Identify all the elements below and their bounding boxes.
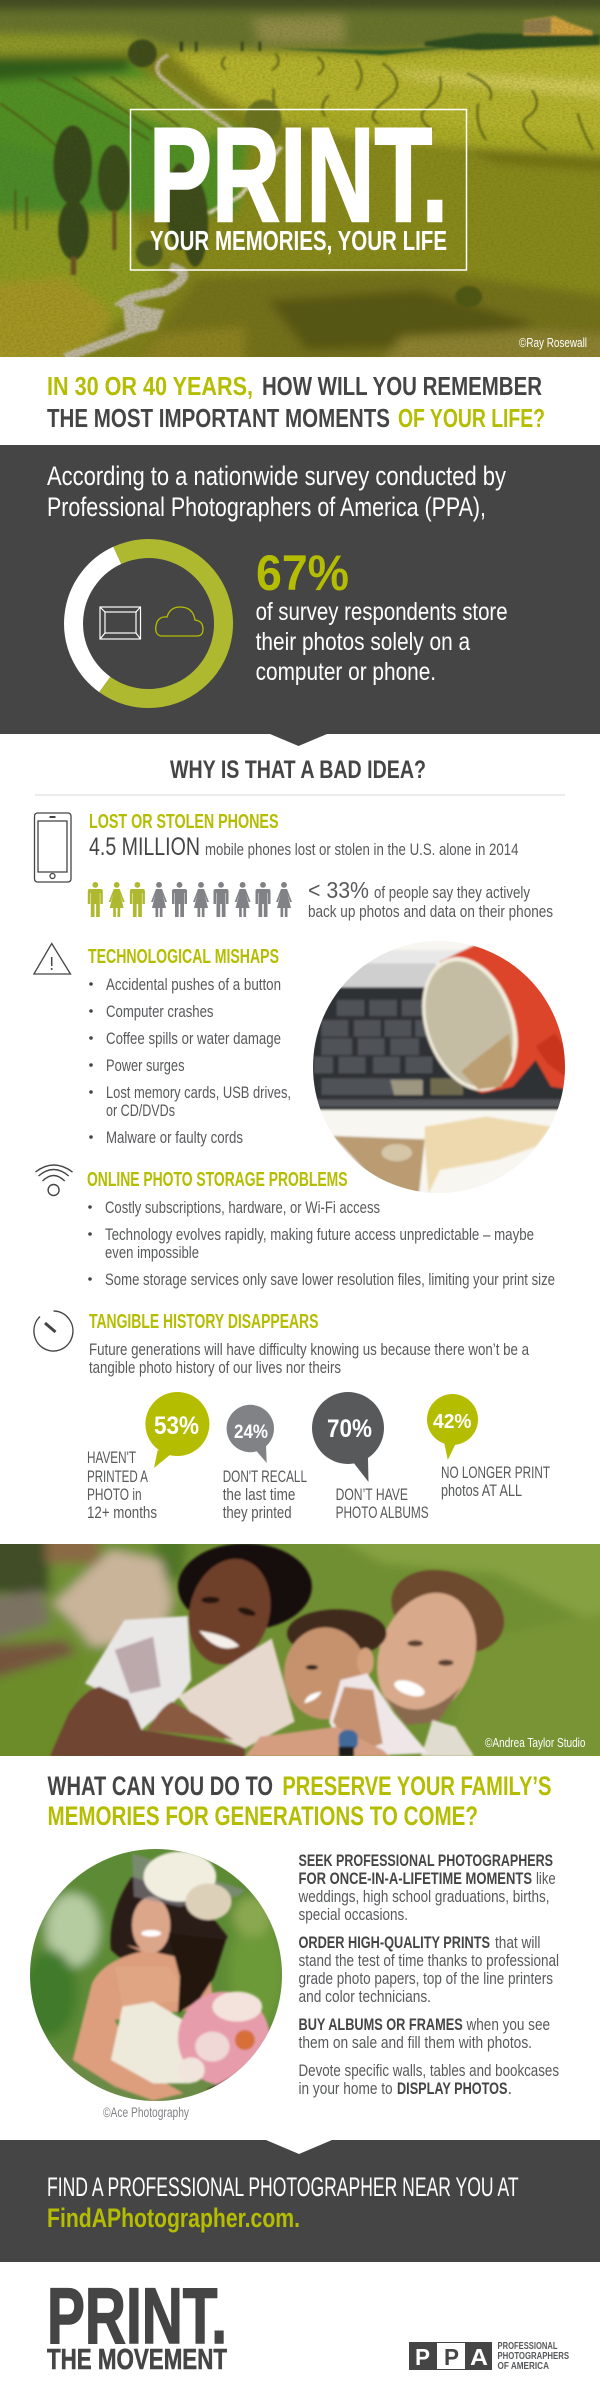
stat description: [256, 598, 508, 686]
advice: display photos: [298, 2062, 559, 2098]
hair over shoulder: [168, 1933, 226, 2013]
main question heading: [47, 371, 545, 433]
woman: white knit top: [85, 1616, 191, 1730]
section: technological mishaps: Accidental pushes of a button: [106, 976, 281, 994]
stat bubble: 42%: 42%: [433, 1411, 472, 1433]
advice: order high-quality prints: [298, 1934, 559, 2006]
stat: less than 33 percent back up: < 33%: [308, 877, 369, 903]
stat bubble: 70%: 70%: [327, 1415, 372, 1443]
chest: [181, 1984, 182, 1994]
logo: Print. The Movement: [47, 2271, 227, 2376]
section: technological mishaps: Coffee spills or water damage: [106, 1030, 281, 1048]
advice: display photos: in your home to: [298, 2080, 393, 2098]
advice: order high-quality prints: that will: [495, 1934, 540, 1952]
advice: seek professional photographers: FOR ONCE-IN-A-LIFETIME MOMENTS: [298, 1870, 532, 1888]
advice: seek professional photographers: weddings, high school graduations, births,: [298, 1888, 550, 1906]
stat bubble: 24%: 24%: [234, 1422, 268, 1443]
logo: Professional Photographers of America: A: [470, 2344, 488, 2370]
advice: order high-quality prints: and color technicians.: [298, 1988, 431, 2006]
advice: seek professional photographers: like: [536, 1870, 556, 1888]
survey intro text: [47, 461, 506, 522]
section: online photo storage problems: Costly subscriptions, hardware, or Wi-Fi access: [105, 1199, 380, 1217]
stat description: their photos solely on a: [256, 628, 470, 656]
section: technological mishaps: Malware or faulty cords: [106, 1129, 243, 1147]
section: lost or stolen phones: [89, 811, 518, 861]
photo: bride with bouquet: [30, 1849, 282, 2101]
main question heading: IN 30 OR 40 YEARS,: [47, 371, 253, 401]
baby: [287, 1609, 386, 1657]
stat bubble: 42%: photos AT ALL: [441, 1482, 522, 1500]
stat bubble: 24%: DON'T RECALL: [223, 1468, 307, 1486]
stat bubble: 53%: [87, 1392, 209, 1522]
hero title box: [130, 101, 466, 270]
logo: Professional Photographers of America: [409, 2340, 569, 2372]
icon: photo frame: [100, 607, 140, 639]
section: technological mishaps: Power surges: [106, 1057, 184, 1075]
advice: seek professional photographers: special occasions.: [298, 1906, 408, 1924]
advice: display photos: DISPLAY PHOTOS: [397, 2080, 508, 2098]
section: tangible history disappears: TANGIBLE HISTORY DISAPPEARS: [89, 1311, 318, 1333]
stat bubble: 53%: HAVEN'T: [87, 1449, 136, 1467]
panel: find a photographer call to action: FindAPhotographer.com.: [47, 2203, 300, 2233]
hand and watch: [245, 1727, 390, 1757]
stat bubble: 42%: NO LONGER PRINT: [441, 1464, 550, 1482]
stat: 67%: 67%: [256, 545, 349, 601]
stat bubble: 24%: they printed: [223, 1504, 292, 1522]
logo: Professional Photographers of America: P: [444, 2344, 459, 2370]
road: [157, 55, 232, 128]
stat bubble: 53%: PHOTO in: [87, 1486, 142, 1504]
icon: wifi: [36, 1165, 72, 1196]
section: lost or stolen phones: LOST OR STOLEN PHONES: [89, 811, 278, 833]
main question heading: OF YOUR LIFE?: [398, 403, 545, 433]
stat: less than 33 percent back up: [308, 877, 553, 921]
survey intro text: Professional Photographers of America (PPA),: [47, 492, 486, 522]
section: online photo storage problems: ONLINE PHOTO STORAGE PROBLEMS: [87, 1169, 348, 1191]
panel: survey: [0, 445, 600, 746]
survey intro text: According to a nationwide survey conducted by: [47, 461, 506, 491]
stat bubble: 70%: [312, 1392, 429, 1522]
heading: what can you do: [48, 1771, 551, 1831]
dress: [111, 2002, 191, 2083]
advice: buy albums or frames: them on sale and fill them with photos.: [298, 2034, 532, 2052]
bouquet: [178, 1992, 270, 2085]
icon: timer: [34, 1311, 73, 1351]
advice: buy albums or frames: when you see: [466, 2016, 550, 2034]
stat bubble: 24%: the last time: [223, 1486, 295, 1504]
section: technological mishaps: Lost memory cards, USB drives,: [106, 1084, 291, 1102]
distant trees: [425, 33, 600, 50]
stat: less than 33 percent back up: of people say they actively: [374, 884, 531, 902]
tyre tracks on the fields: [0, 53, 593, 230]
advice: order high-quality prints: ORDER HIGH-QUALITY PRINTS: [298, 1934, 490, 1952]
stat bubble: 53%: 53%: [154, 1412, 199, 1440]
advice: display photos: .: [508, 2080, 512, 2098]
hat and veil: [132, 1853, 245, 1907]
panel: find a photographer call to action: [0, 2140, 600, 2262]
icon: phone: [34, 813, 71, 882]
hero photo: Tuscan landscape: [0, 0, 600, 387]
logo: Professional Photographers of America: P: [415, 2344, 430, 2370]
icon: warning triangle: [34, 944, 70, 974]
photo: coffee spilled on keyboard: [313, 941, 565, 1193]
heading: what can you do: WHAT CAN YOU DO TO: [48, 1771, 273, 1801]
logo: Professional Photographers of America: OF AMERICA: [498, 2360, 549, 2372]
section: technological mishaps: Computer crashes: [106, 1003, 214, 1021]
woman: arm: [50, 1687, 245, 1760]
stat bubble: 53%: 12+ months: [87, 1504, 157, 1522]
logo: Print. The Movement: PRINT.: [47, 2271, 227, 2360]
hero title: PRINT.: PRINT.: [149, 101, 448, 250]
photo credit: Ace Photography: ©Ace Photography: [103, 2104, 189, 2120]
man: [390, 1568, 506, 1652]
section: technological mishaps: or CD/DVDs: [106, 1102, 175, 1120]
stat description: of survey respondents store: [256, 598, 508, 626]
stat bubble: 70%: DON’T HAVE: [336, 1486, 408, 1504]
hero subtitle: YOUR MEMORIES, YOUR LIFE: [150, 225, 447, 256]
red cup: [440, 940, 574, 1093]
section: technological mishaps: [88, 946, 291, 1147]
face: [132, 1897, 170, 1953]
section: online photo storage problems: [87, 1169, 555, 1289]
stat description: computer or phone.: [256, 658, 436, 686]
advice: buy albums or frames: [298, 2016, 550, 2052]
advice: seek professional photographers: [298, 1852, 556, 1924]
section: lost or stolen phones: 4.5 MILLION: [89, 833, 200, 861]
stat bubble: 42%: [427, 1394, 550, 1500]
logo: Print. The Movement: THE MOVEMENT: [47, 2344, 227, 2376]
icon: cloud: [156, 607, 203, 636]
section: lost or stolen phones: mobile phones lost or stolen in the U.S. alone in 2014: [205, 841, 518, 859]
heading: why is that a bad idea: WHY IS THAT A BAD IDEA?: [170, 756, 426, 784]
stat bubble: 24%: [223, 1405, 307, 1522]
section: online photo storage problems: even impossible: [105, 1244, 199, 1262]
main question heading: THE MOST IMPORTANT MOMENTS: [47, 403, 390, 433]
donut chart: 67 percent: [74, 549, 224, 699]
heading: what can you do: MEMORIES FOR GENERATIONS TO COME?: [48, 1801, 478, 1831]
shoulder and arm: [73, 1945, 214, 2101]
logo: Professional Photographers of America: PROFESSIONAL: [498, 2340, 558, 2352]
pictogram: people, 3 of 10 highlighted: [88, 882, 292, 917]
stat bubble: 53%: PRINTED A: [87, 1468, 148, 1486]
advice: buy albums or frames: BUY ALBUMS OR FRAMES: [298, 2016, 463, 2034]
photo: family on the grass: [0, 1544, 600, 1756]
section: tangible history disappears: tangible photo history of our lives nor theirs: [89, 1359, 341, 1377]
woman: hair, face: [178, 1543, 312, 1630]
logo: Professional Photographers of America: PHOTOGRAPHERS: [498, 2350, 569, 2362]
section: technological mishaps: TECHNOLOGICAL MISHAPS: [88, 946, 279, 968]
hair: [109, 1876, 229, 1959]
cypress trees: [54, 126, 92, 204]
stat bubble: 70%: PHOTO ALBUMS: [336, 1504, 429, 1522]
section: tangible history disappears: [89, 1311, 530, 1377]
stat: less than 33 percent back up: back up photos and data on their phones: [308, 903, 553, 921]
